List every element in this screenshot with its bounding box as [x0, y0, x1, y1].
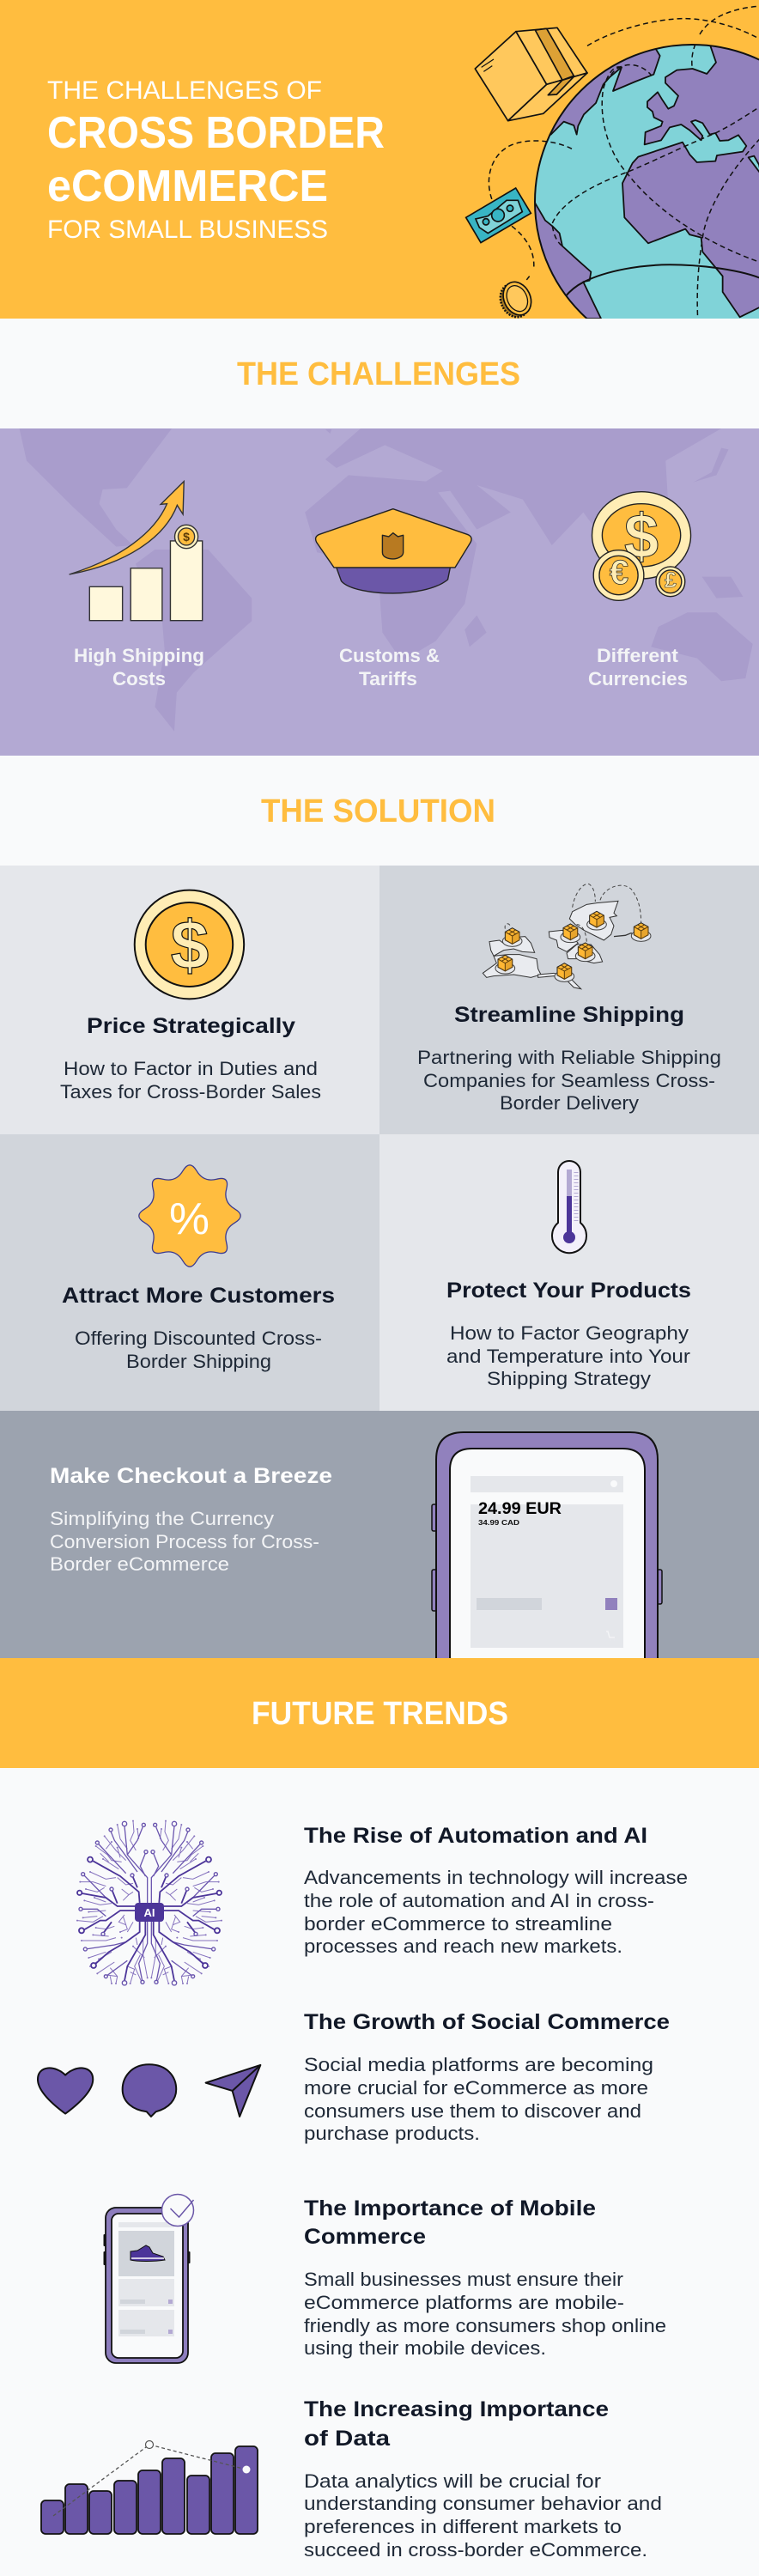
label: different currencies: Currencies	[588, 668, 688, 690]
icon: shipping map	[483, 884, 651, 989]
icon: parcel box	[475, 27, 587, 121]
icon: currency coins: €	[610, 554, 628, 592]
icon: mobile shop phone	[103, 2195, 194, 2363]
label: high shipping costs: High Shipping	[74, 645, 204, 666]
description	[304, 2054, 653, 2144]
icon: banknote	[466, 188, 531, 243]
description: Offering Discounted Cross-	[75, 1327, 322, 1349]
description: and Temperature into Your	[446, 1346, 690, 1367]
description: eCommerce platforms are mobile-	[304, 2292, 624, 2313]
heading	[304, 2397, 609, 2451]
description	[50, 1508, 319, 1575]
panel: make checkout a breeze: Make Checkout a Breeze	[50, 1464, 332, 1488]
description	[75, 1327, 322, 1372]
description: the role of automation and AI in cross-	[304, 1890, 654, 1911]
description: Shipping Strategy	[487, 1368, 651, 1389]
label: customs and tariffs: Customs &	[339, 645, 440, 666]
title: THE CHALLENGES OF	[47, 76, 322, 105]
icon: customs cap	[316, 509, 471, 593]
description	[304, 1867, 688, 1957]
icon: rising bar chart	[70, 482, 203, 621]
icon: rising bar chart: $	[183, 530, 190, 544]
trend: automation and AI	[76, 1820, 688, 1985]
trend: social commerce	[38, 2010, 670, 2144]
icon: phone with currency checkout	[432, 1432, 662, 1670]
description: using their mobile devices.	[304, 2337, 546, 2359]
description: Social media platforms are becoming	[304, 2054, 653, 2075]
description	[304, 2470, 662, 2561]
banner: future trends	[0, 1658, 759, 1768]
icon: currency coins: £	[665, 568, 677, 592]
panel: streamline shipping	[380, 866, 759, 1134]
icon: bar chart with trend line	[41, 2440, 258, 2534]
description: Advancements in technology will increase	[304, 1867, 688, 1888]
description: Simplifying the Currency	[50, 1508, 274, 1529]
description: Data analytics will be crucial for	[304, 2470, 601, 2492]
description: How to Factor Geography	[450, 1322, 689, 1344]
description: succeed in cross-border eCommerce.	[304, 2539, 647, 2561]
globe illustration	[534, 44, 759, 319]
world map background	[20, 428, 753, 732]
heading: the challenges: THE CHALLENGES	[237, 356, 520, 392]
trend: importance of data	[41, 2397, 662, 2561]
dashed routes	[489, 6, 759, 280]
icon: phone with currency checkout: 24.99 EUR	[478, 1500, 562, 1518]
icon: dollar coin	[135, 890, 244, 999]
description: Border Shipping	[126, 1351, 271, 1372]
heading: the solution: THE SOLUTION	[261, 793, 495, 829]
description	[60, 1058, 321, 1103]
description: more crucial for eCommerce as more	[304, 2077, 648, 2099]
heading: of Data	[304, 2427, 391, 2451]
description: Border Delivery	[500, 1092, 639, 1114]
label: different currencies	[588, 645, 688, 690]
icon: AI circuit brain: AI	[144, 1906, 155, 1919]
icon: discount badge: %	[169, 1194, 209, 1244]
heading: The Importance of Mobile	[304, 2196, 596, 2221]
title: eCOMMERCE	[47, 161, 328, 211]
banner: future trends: FUTURE TRENDS	[252, 1696, 508, 1732]
panel: attract more customers: Attract More Customers	[62, 1284, 335, 1308]
label: customs and tariffs	[339, 645, 440, 690]
panel: protect your products: Protect Your Products	[446, 1279, 691, 1303]
description: Border eCommerce	[50, 1553, 229, 1575]
description: Small businesses must ensure their	[304, 2269, 623, 2290]
description: preferences in different markets to	[304, 2516, 622, 2537]
label: high shipping costs: Costs	[112, 668, 166, 690]
heading: Commerce	[304, 2225, 426, 2249]
description	[446, 1322, 690, 1389]
description: How to Factor in Duties and	[64, 1058, 318, 1079]
title	[47, 76, 385, 244]
description: Taxes for Cross-Border Sales	[60, 1081, 321, 1103]
panel: protect your products	[380, 1134, 759, 1411]
icon: AI circuit brain	[76, 1820, 222, 1985]
hero banner	[0, 0, 759, 319]
panel: price strategically	[0, 866, 380, 1134]
description: understanding consumer behavior and	[304, 2493, 662, 2514]
panel: attract more customers	[0, 1134, 380, 1411]
label: high shipping costs	[74, 645, 204, 690]
description: Partnering with Reliable Shipping	[417, 1047, 721, 1068]
panel: price strategically: Price Strategically	[87, 1014, 295, 1038]
trend: social commerce: The Growth of Social Commerce	[304, 2010, 670, 2034]
description: consumers use them to discover and	[304, 2100, 641, 2122]
label: different currencies: Different	[597, 645, 679, 666]
panel: challenges	[0, 428, 759, 756]
description: border eCommerce to streamline	[304, 1913, 612, 1935]
icon: thermometer	[552, 1161, 586, 1253]
description: processes and reach new markets.	[304, 1935, 622, 1957]
icon: social heart, bubble, plane	[38, 2064, 260, 2117]
trend: mobile commerce	[103, 2195, 666, 2363]
label: customs and tariffs: Tariffs	[359, 668, 417, 690]
section background: challenges heading	[0, 319, 759, 428]
trend: automation and AI: The Rise of Automation and AI	[304, 1824, 647, 1848]
description: friendly as more consumers shop online	[304, 2315, 666, 2336]
title: FOR SMALL BUSINESS	[47, 216, 328, 244]
description: Conversion Process for Cross-	[50, 1531, 319, 1552]
heading: The Increasing Importance	[304, 2397, 609, 2421]
panel: make checkout a breeze	[0, 1411, 759, 1670]
icon: dollar coin: $	[171, 907, 209, 983]
description	[417, 1047, 721, 1114]
icon: currency coins: $	[624, 502, 659, 571]
icon: currency coins	[592, 492, 691, 600]
description	[304, 2269, 666, 2359]
icon: phone with currency checkout: 34.99 CAD	[478, 1519, 519, 1527]
icon: coin	[495, 277, 537, 322]
heading	[304, 2196, 596, 2249]
description: purchase products.	[304, 2123, 480, 2144]
title: CROSS BORDER	[47, 108, 385, 158]
icon: discount badge	[139, 1165, 240, 1267]
panel: streamline shipping: Streamline Shipping	[454, 1003, 684, 1027]
description: Companies for Seamless Cross-	[423, 1070, 715, 1091]
